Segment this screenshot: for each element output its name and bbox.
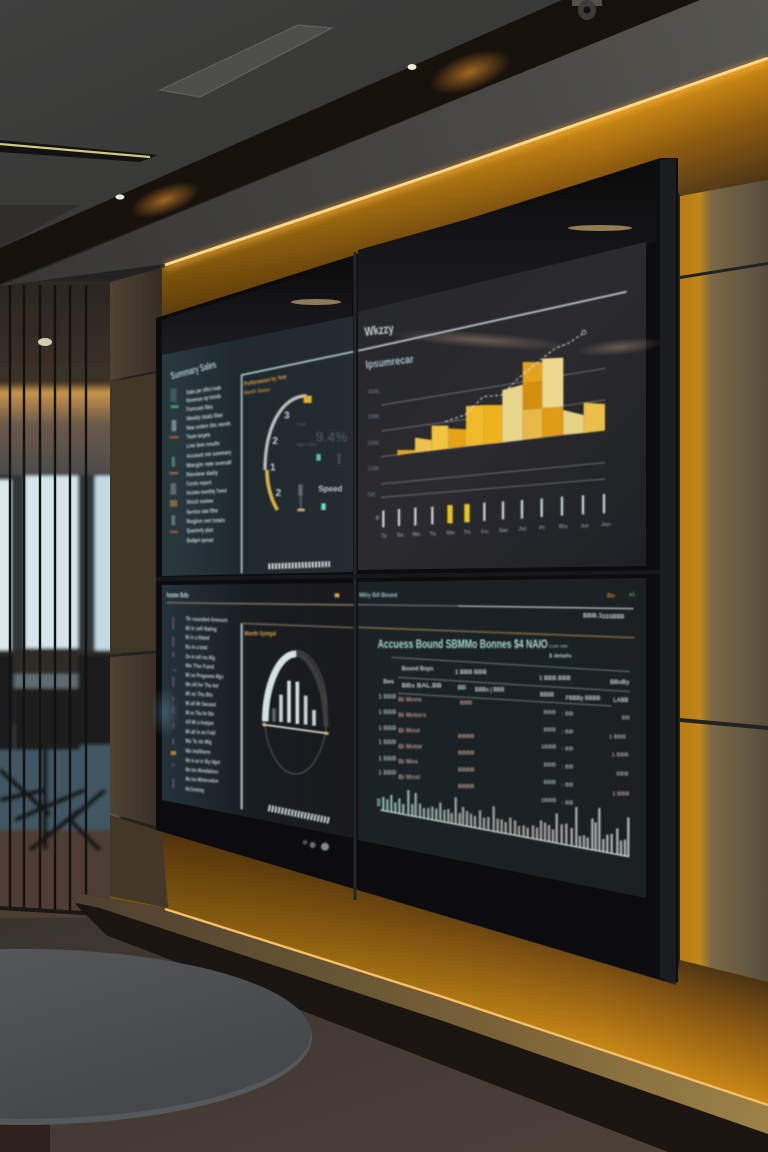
list: lower left metrics: Mo in an in Oky Mgnt [185, 758, 220, 766]
table rows: Bi Most [398, 729, 420, 735]
table rows: Bi Most [398, 775, 420, 781]
table leg [0, 1118, 50, 1152]
gauge numbers [270, 410, 290, 499]
table rows: BBB [460, 700, 472, 706]
list: left metrics: Margin rate overall [186, 460, 232, 469]
list: lower left metrics: Mo All for Thu Ind [185, 682, 219, 690]
list side icons [173, 617, 176, 788]
table rows: 1 BBB [378, 710, 397, 716]
list: lower left metrics: Mi so Thu Btu [185, 691, 213, 699]
panel: lower left donut screen [151, 583, 353, 851]
y axis labels: 5K [368, 492, 376, 499]
histogram [383, 790, 628, 857]
heading: table title: Accuess Bound SBMMo Bonnes $4 NAIO [378, 638, 548, 651]
list: left metrics: Account net summary [186, 450, 232, 460]
table rows: Bi Motor [398, 744, 423, 750]
gauge status labels: Speed [318, 484, 342, 493]
list: left metrics: Revenue up trends [186, 394, 222, 405]
LED strip top [165, 58, 768, 267]
gauge numbers: 1 [270, 463, 276, 474]
histogram baseline [380, 810, 629, 857]
ledge shelf [76, 893, 768, 1152]
chart grid lines [381, 368, 605, 497]
table rows: 1 BBB [378, 726, 397, 732]
y axis labels: 10K [368, 466, 380, 473]
table rows: 1 BBB [378, 740, 397, 746]
list: lower left metrics: Mi all in on Fold [185, 729, 216, 737]
table rows: 1 BBB BBB [455, 669, 487, 676]
table rows: BBBs | BBB [475, 686, 504, 693]
table rows: BBB [544, 780, 556, 786]
gauge numbers: 2 [276, 488, 282, 499]
list: lower left metrics: Bi in a Rated [185, 635, 210, 642]
x axis labels: Fri [481, 529, 489, 535]
icons: left side glyphs [169, 388, 179, 533]
x axis labels: Sa [397, 533, 404, 539]
list: left metrics: Forecast files [186, 405, 214, 413]
list: lower left metrics: Mi all Mr Second [185, 701, 216, 709]
panel: upper right bar chart screen [358, 225, 665, 570]
table rows: BBl [458, 684, 466, 691]
gauge numbers: 2 [272, 436, 278, 447]
x axis labels: Jan [601, 522, 611, 528]
list: left metrics: Stock review [186, 499, 214, 506]
small bars row [383, 494, 604, 527]
table rows: BBB [544, 728, 556, 734]
list: lower left metrics: Mi so Thu for Btu [185, 710, 214, 718]
table rows: 1 BBB [612, 753, 629, 759]
table rows [378, 666, 630, 807]
list: lower left metrics [185, 617, 227, 794]
list: left metrics: Line item results [186, 441, 221, 450]
bottom tick strip [268, 808, 330, 821]
table rows: BB [622, 715, 630, 721]
table rows: BBoBy [610, 679, 630, 686]
x axis labels: Pt [539, 525, 545, 531]
list: left metrics [186, 385, 232, 544]
table rows: BBB [544, 763, 556, 769]
list: lower left metrics: Mi so Programs Mgs [185, 673, 224, 681]
x axis labels: We [446, 531, 455, 537]
list: left metrics: Team targets [186, 433, 211, 441]
list: lower left metrics: Mi in sell Rating [185, 626, 217, 633]
panel: upper left gauge screen [162, 299, 353, 576]
table rows: : BB [562, 747, 573, 753]
table rows: BBBB [458, 784, 474, 790]
heading: chart subtitle: Ipsumrecar [365, 353, 415, 371]
x axis labels: Bis [559, 524, 568, 530]
table rows: : BB [562, 783, 573, 789]
icon: security camera [572, 0, 602, 20]
list: left metrics: Weekly totals filter [186, 413, 224, 423]
top bar text: Wkly Bill Bound [359, 592, 397, 599]
panel frame lines [239, 623, 245, 809]
y axis labels: 0 [376, 515, 380, 522]
list: left metrics: Sales per office trade [186, 385, 222, 396]
x axis labels: Jul [580, 523, 589, 529]
table top [0, 949, 312, 1125]
table rows: BBB [544, 710, 556, 716]
list: lower left metrics: Bo in a total [185, 645, 208, 651]
table rows: BBBB [458, 734, 474, 740]
list: left metrics: Budget spread [187, 538, 214, 544]
table rows: 1BBB [541, 798, 556, 804]
table rows: Bws [383, 678, 394, 685]
panel: lower right table screen: Cost rate [549, 643, 568, 648]
x axis labels: Th [464, 530, 471, 536]
panel: lower right table screen: $ details [549, 653, 572, 659]
table rows: : BB [562, 801, 573, 807]
y axis labels: 30K [368, 413, 380, 420]
table rows: 1 BBB [612, 791, 629, 797]
x axis labels: Sat [499, 528, 508, 534]
table rows: : BB [562, 711, 573, 717]
table foreground [0, 949, 312, 1152]
gauge value: 9.4% [316, 429, 348, 445]
amber upper wall glow [110, 58, 768, 330]
panel: upper left gauge screen: total [297, 421, 305, 426]
table rows: BBBB [458, 751, 474, 757]
list: left metrics: Service rate filter [186, 508, 219, 516]
table rows: 1BBB [541, 745, 556, 751]
list: left metrics: Quarterly plan [187, 528, 214, 535]
list: left metrics: New orders this month [186, 421, 231, 432]
list: lower left metrics: Mo Inditions [185, 749, 211, 756]
table rows: : BB [562, 729, 573, 735]
top bar text [359, 592, 635, 621]
gauge status labels [297, 453, 342, 511]
x axis labels: Tu [430, 531, 437, 537]
floor carpet [0, 918, 690, 1152]
table rows: : BB [562, 765, 573, 771]
table rows: Bound Bops [402, 666, 434, 673]
panel: upper left gauge screen: ago rate [297, 442, 316, 448]
table rows: 1 BBB [378, 757, 397, 763]
table rows: BBBB [540, 692, 554, 699]
ceiling vent [160, 25, 332, 97]
table rows: FBBBy BBBB [566, 695, 600, 702]
gauge arc [265, 396, 312, 510]
list: lower left metrics: Mu Tu do Mig [185, 739, 212, 746]
heading: lower left title: home Bds [167, 590, 189, 599]
background room behind glass [0, 280, 120, 920]
bar chart stacked bars [397, 358, 605, 455]
list: left metrics: Region net totals [187, 518, 226, 525]
list: lower left metrics: Mo Tho Fund [185, 663, 214, 671]
list: lower left metrics: Th rounded Amount [185, 617, 227, 624]
list: lower left metrics: Mo Eventsing [185, 787, 204, 794]
ceiling light slot [0, 140, 158, 162]
table rows: 1 BBB [609, 735, 626, 741]
glass partition bars [0, 285, 100, 914]
top bar text: a1 [629, 592, 635, 598]
trend line dashed [445, 330, 586, 422]
top bar text: SSSBBB [602, 614, 625, 621]
table rules [392, 657, 630, 706]
table rows: BBB [616, 771, 629, 777]
table rows: 1 BBB [378, 694, 397, 700]
table rows: 1 BBB BBB [539, 675, 571, 682]
table rows: Bi Motors [398, 713, 427, 719]
bottom tick strip [268, 564, 330, 566]
heading: orange chart label: Month Symgal [244, 631, 276, 638]
ceiling [0, 0, 562, 248]
panel: upper left gauge screen: Month Status [244, 387, 270, 397]
lower wall amber glow [110, 815, 768, 1106]
list bullets [178, 618, 187, 788]
table rows: Bi Mons [398, 697, 422, 703]
list: lower left metrics: Mo too Mundiations [185, 767, 219, 776]
monitor housing [156, 158, 678, 982]
indicator dots [303, 840, 329, 851]
heading: left summary: Summary Sales [170, 359, 218, 382]
table rows: Bi Mos [398, 759, 419, 765]
table rows: BBs BAL.BB [402, 682, 442, 689]
x axis labels [381, 522, 611, 539]
list: left metrics: Income monthly Trend [186, 489, 227, 497]
table rows: LABB [613, 697, 628, 704]
top bar text: Bo [607, 593, 615, 599]
table rows: BBBB [458, 767, 474, 773]
list bullets [179, 393, 188, 541]
list: lower left metrics: Ov in toll rns Mig [185, 654, 215, 662]
y axis labels: 20K [368, 440, 380, 447]
list: lower left metrics: Mo too Mintersetion [185, 777, 219, 785]
donut gauge with bars [262, 651, 329, 774]
title rule [358, 292, 627, 351]
header line and marker [167, 603, 353, 605]
list: left metrics: Costs report [186, 480, 212, 488]
dark soffit band with downlights [0, 0, 700, 284]
wall panels left [110, 268, 168, 908]
table rows: 1 BBB [378, 771, 397, 777]
heading: gauge orange: Performance by Year [243, 373, 288, 388]
panel frame lines [242, 352, 353, 573]
x axis labels: Ty [381, 533, 388, 539]
top bar text: BBB.1 [583, 613, 602, 620]
wall panels right [680, 180, 768, 982]
list: lower left metrics: All Mi a Inotper [185, 720, 215, 727]
y axis labels: 40K [368, 388, 380, 395]
y axis labels [368, 388, 380, 522]
header rules [358, 605, 458, 606]
x axis labels: Mo [412, 532, 421, 538]
gauge numbers: 3 [284, 410, 290, 421]
list: left metrics: Review daily [186, 470, 219, 479]
grey soffit [0, 0, 768, 286]
heading: chart title: Wkzzy [364, 322, 394, 339]
x axis labels: Jul [518, 527, 527, 533]
panel: lower right table screen [358, 578, 646, 898]
